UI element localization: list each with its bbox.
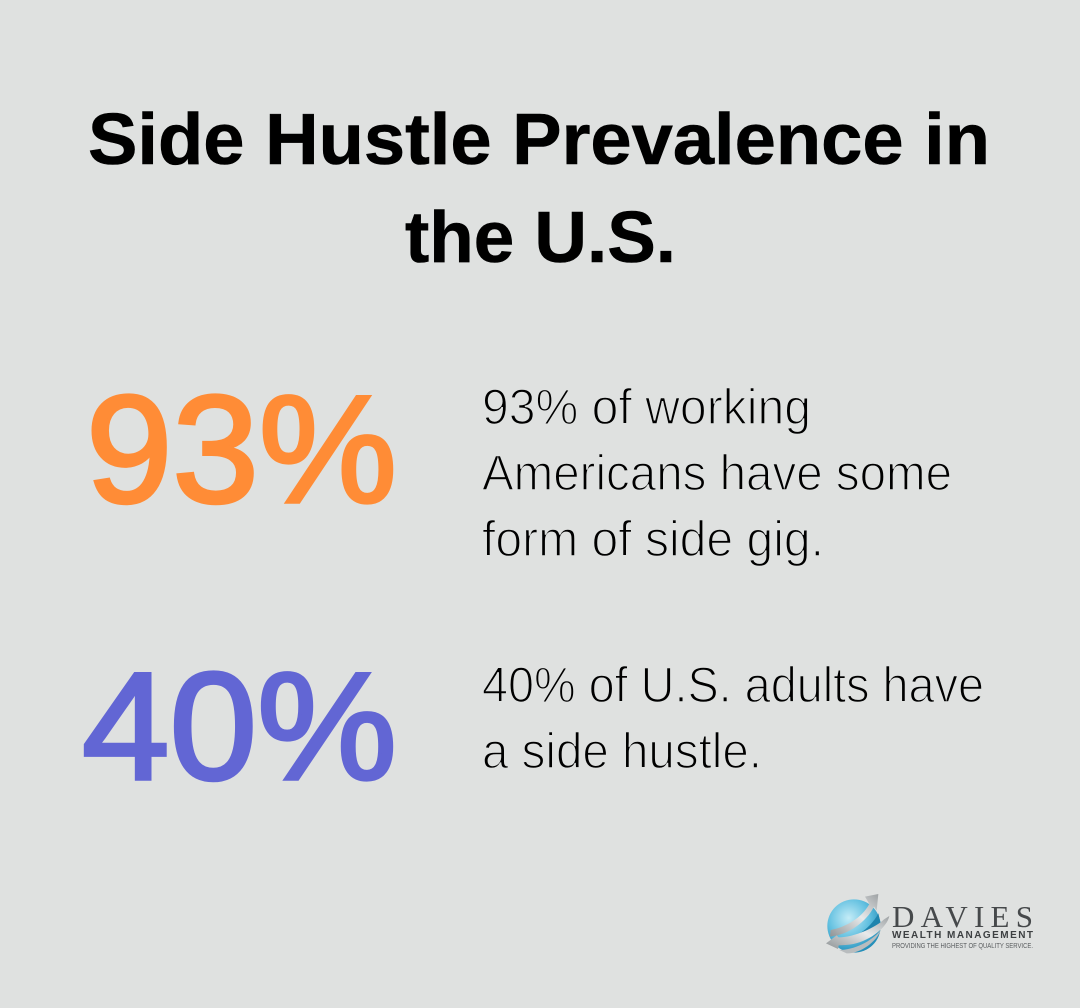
title	[88, 100, 990, 278]
logo tagline: PROVIDING THE HIGHEST OF QUALITY SERVICE.	[892, 941, 1033, 950]
stat description: side hustle: 40% of U.S. adults have	[482, 657, 984, 713]
stat description: side gig: 93% of working	[482, 379, 811, 435]
title: the U.S.	[405, 198, 676, 278]
stat number: 93%: 93%	[86, 364, 397, 535]
title: Side Hustle Prevalence in	[88, 100, 990, 180]
stat description: side gig	[482, 379, 952, 567]
logo wordmark: DAVIES	[892, 899, 1033, 934]
stat: 40%	[82, 641, 984, 812]
logo subtitle: WEALTH MANAGEMENT	[892, 930, 1033, 941]
logo: Davies Wealth Management	[826, 894, 1033, 953]
stat description: side hustle	[482, 657, 984, 779]
stat number: 40%: 40%	[82, 641, 397, 812]
stat description: side gig: form of side gig.	[482, 511, 824, 567]
stat: 93%	[86, 364, 952, 567]
icon: globe with arrows	[826, 894, 889, 953]
stat description: side hustle: a side hustle.	[482, 723, 762, 779]
stat description: side gig: Americans have some	[482, 445, 952, 501]
